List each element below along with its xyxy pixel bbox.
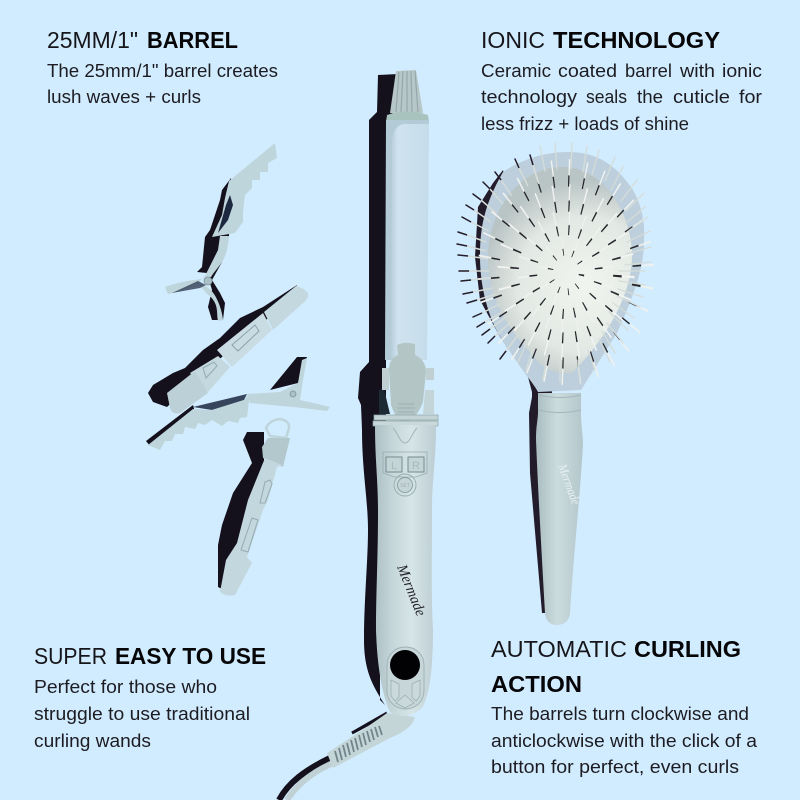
body: ionic technology: for xyxy=(739,87,762,107)
body: ionic technology: seals xyxy=(586,87,627,107)
body: ionic technology: coated xyxy=(558,61,617,81)
heading: ionic technology: TECHNOLOGY xyxy=(553,27,720,53)
outer bristles left light shafts xyxy=(467,165,539,351)
heading: barrel: 25MM/1" xyxy=(47,27,138,53)
brush handle: Mermade xyxy=(555,461,584,507)
heading: easy to use: EASY TO USE xyxy=(115,643,266,669)
body: ionic technology: cuticle xyxy=(673,87,730,107)
heading: automatic curling action: CURLING xyxy=(634,636,741,662)
body: automatic curling action: button for perfect, even curls xyxy=(491,757,739,777)
body: barrel: lush waves + curls xyxy=(47,87,201,107)
text block: barrel xyxy=(47,27,278,107)
body: ionic technology: Ceramic xyxy=(481,61,551,81)
heading: automatic curling action: AUTOMATIC xyxy=(491,636,627,662)
clip 3 xyxy=(146,357,330,450)
body: easy to use xyxy=(34,677,250,751)
barrel xyxy=(385,120,429,360)
text block: easy to use xyxy=(34,643,266,751)
display panel xyxy=(387,647,424,709)
handle xyxy=(375,425,436,716)
brush cushion xyxy=(488,167,632,373)
body: easy to use: curling wands xyxy=(34,731,151,751)
outer bristles right and top xyxy=(518,143,651,382)
clip 4 xyxy=(218,419,290,596)
clip 1 xyxy=(165,143,277,321)
brand logo: Mermade xyxy=(393,562,428,619)
brush head xyxy=(480,152,644,392)
barrel cap xyxy=(386,70,429,122)
heading: easy to use xyxy=(34,643,266,669)
set button: SET xyxy=(400,483,410,489)
set button xyxy=(394,474,416,496)
clasp lever xyxy=(389,343,426,423)
clasp side tabs xyxy=(382,368,434,390)
L and R buttons: R xyxy=(412,460,420,472)
L and R buttons: L xyxy=(391,460,397,472)
body: barrel: The 25mm/1" barrel creates xyxy=(47,61,278,81)
heading: automatic curling action: ACTION xyxy=(491,671,582,697)
brush shadow xyxy=(475,170,552,613)
heading: automatic curling action xyxy=(491,636,741,697)
power cord xyxy=(279,758,330,800)
outer bristles left dark tips xyxy=(457,155,533,359)
text block: automatic curling action xyxy=(491,636,758,777)
curling wand xyxy=(279,70,438,800)
inner bristles xyxy=(473,153,659,391)
clip 2 xyxy=(148,285,308,413)
body: easy to use: Perfect for those who xyxy=(34,677,217,697)
heading: ionic technology xyxy=(481,27,720,53)
cord strain relief xyxy=(327,713,415,768)
hair clips xyxy=(146,143,330,596)
flange xyxy=(374,415,438,420)
hair brush xyxy=(457,143,659,625)
body: ionic technology: with xyxy=(679,61,715,81)
body: barrel xyxy=(47,61,278,107)
brush handle xyxy=(536,393,584,625)
heading: ionic technology: IONIC xyxy=(481,27,545,53)
body: ionic technology: less frizz + loads of shine xyxy=(481,114,689,134)
wand shadow xyxy=(358,74,398,712)
body: automatic curling action xyxy=(491,704,758,777)
body: automatic curling action: anticlockwise with the click of a xyxy=(491,731,758,751)
body: automatic curling action: The barrels turn clockwise and xyxy=(491,704,749,724)
body: ionic technology: barrel xyxy=(625,61,672,81)
body: ionic technology: ionic xyxy=(722,61,762,81)
body: ionic technology: the xyxy=(637,87,663,107)
text block: ionic technology xyxy=(481,27,762,134)
handle notch xyxy=(393,428,417,443)
body: ionic technology xyxy=(481,61,762,134)
body: ionic technology: technology xyxy=(481,87,577,107)
heading: barrel xyxy=(47,27,238,53)
L and R buttons xyxy=(383,452,427,477)
body: easy to use: struggle to use traditional xyxy=(34,704,250,724)
heading: barrel: BARREL xyxy=(147,27,238,53)
heading: easy to use: SUPER xyxy=(34,643,107,669)
mount behind clasp xyxy=(379,389,390,414)
